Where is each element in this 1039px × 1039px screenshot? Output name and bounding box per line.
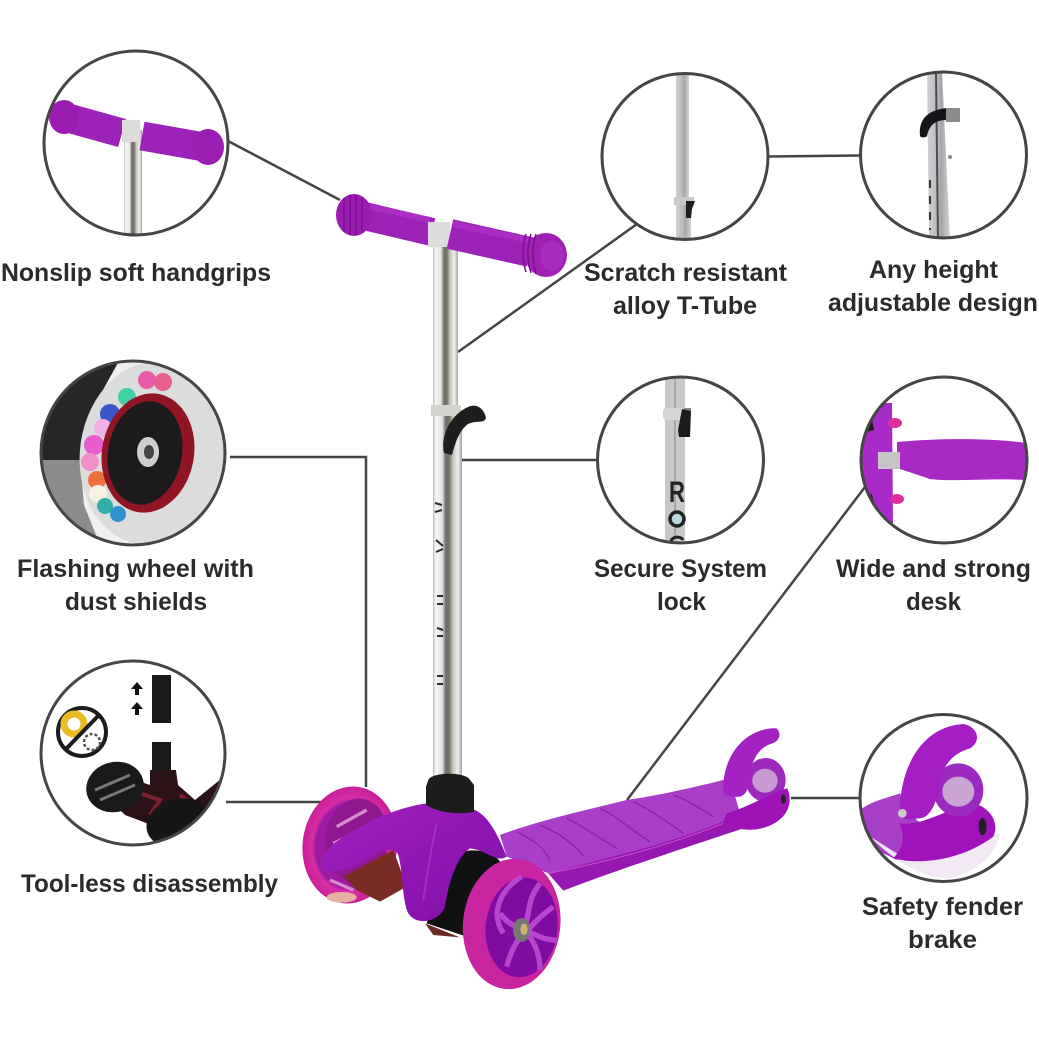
brake and fork shadow parts <box>343 850 503 937</box>
front fork body <box>321 803 507 921</box>
front wheel <box>456 854 567 994</box>
stem lock lever <box>443 406 486 455</box>
right handgrip <box>450 224 567 277</box>
circle: secure system lock: R <box>669 476 685 509</box>
circle: flashing wheel <box>40 360 226 546</box>
T-bar joint <box>428 222 450 247</box>
label: secure system lock: lock <box>657 588 706 616</box>
label: any height adjustable design: Any height <box>869 256 999 284</box>
circle: tool-less disassembly <box>41 661 226 854</box>
circle: height adjustable <box>860 70 1026 240</box>
circle: secure system lock <box>598 375 764 545</box>
circle: safety fender brake <box>860 714 1027 882</box>
LED lights <box>81 371 172 522</box>
label: any height adjustable design <box>828 256 1038 317</box>
stem collar <box>426 774 474 813</box>
label: any height adjustable design: adjustable design <box>828 289 1038 317</box>
icon: up arrows <box>131 682 143 715</box>
label: scratch resistant alloy t-tube <box>584 259 788 320</box>
connector lines <box>226 141 865 802</box>
label: nonslip soft handgrips: Nonslip soft handgrips <box>1 259 271 287</box>
label: wide and strong desk: Wide and strong <box>836 555 1031 583</box>
left handgrip <box>336 194 432 236</box>
label: secure system lock: Secure System <box>594 555 767 583</box>
label: tool-less disassembly: Tool-less disassembly <box>21 870 278 898</box>
label: safety fender brake <box>862 893 1023 954</box>
circle: wide deck <box>860 377 1027 543</box>
rear brake fender <box>723 728 790 830</box>
deck side <box>547 813 743 891</box>
circle: alloy T-tube <box>602 72 768 242</box>
deck <box>500 778 740 873</box>
icon: no tools gear <box>58 708 106 756</box>
scooter illustration <box>295 194 790 994</box>
label: scratch resistant alloy t-tube: Scratch resistant <box>584 259 788 287</box>
label: secure system lock <box>594 555 767 616</box>
label: scratch resistant alloy t-tube: alloy T-Tube <box>613 292 757 320</box>
circle: nonslip handgrips <box>44 51 228 240</box>
label: flashing wheel with dust shields: Flashing wheel with <box>17 555 254 583</box>
label: safety fender brake: brake <box>908 926 977 954</box>
label: wide and strong desk: desk <box>906 588 961 616</box>
label: flashing wheel with dust shields: dust shields <box>65 588 207 616</box>
label: wide and strong desk <box>836 555 1031 616</box>
rear left wheel <box>295 780 405 910</box>
label: flashing wheel with dust shields <box>17 555 254 616</box>
label: safety fender brake: Safety fender <box>862 893 1023 921</box>
scooter stem <box>431 246 462 780</box>
